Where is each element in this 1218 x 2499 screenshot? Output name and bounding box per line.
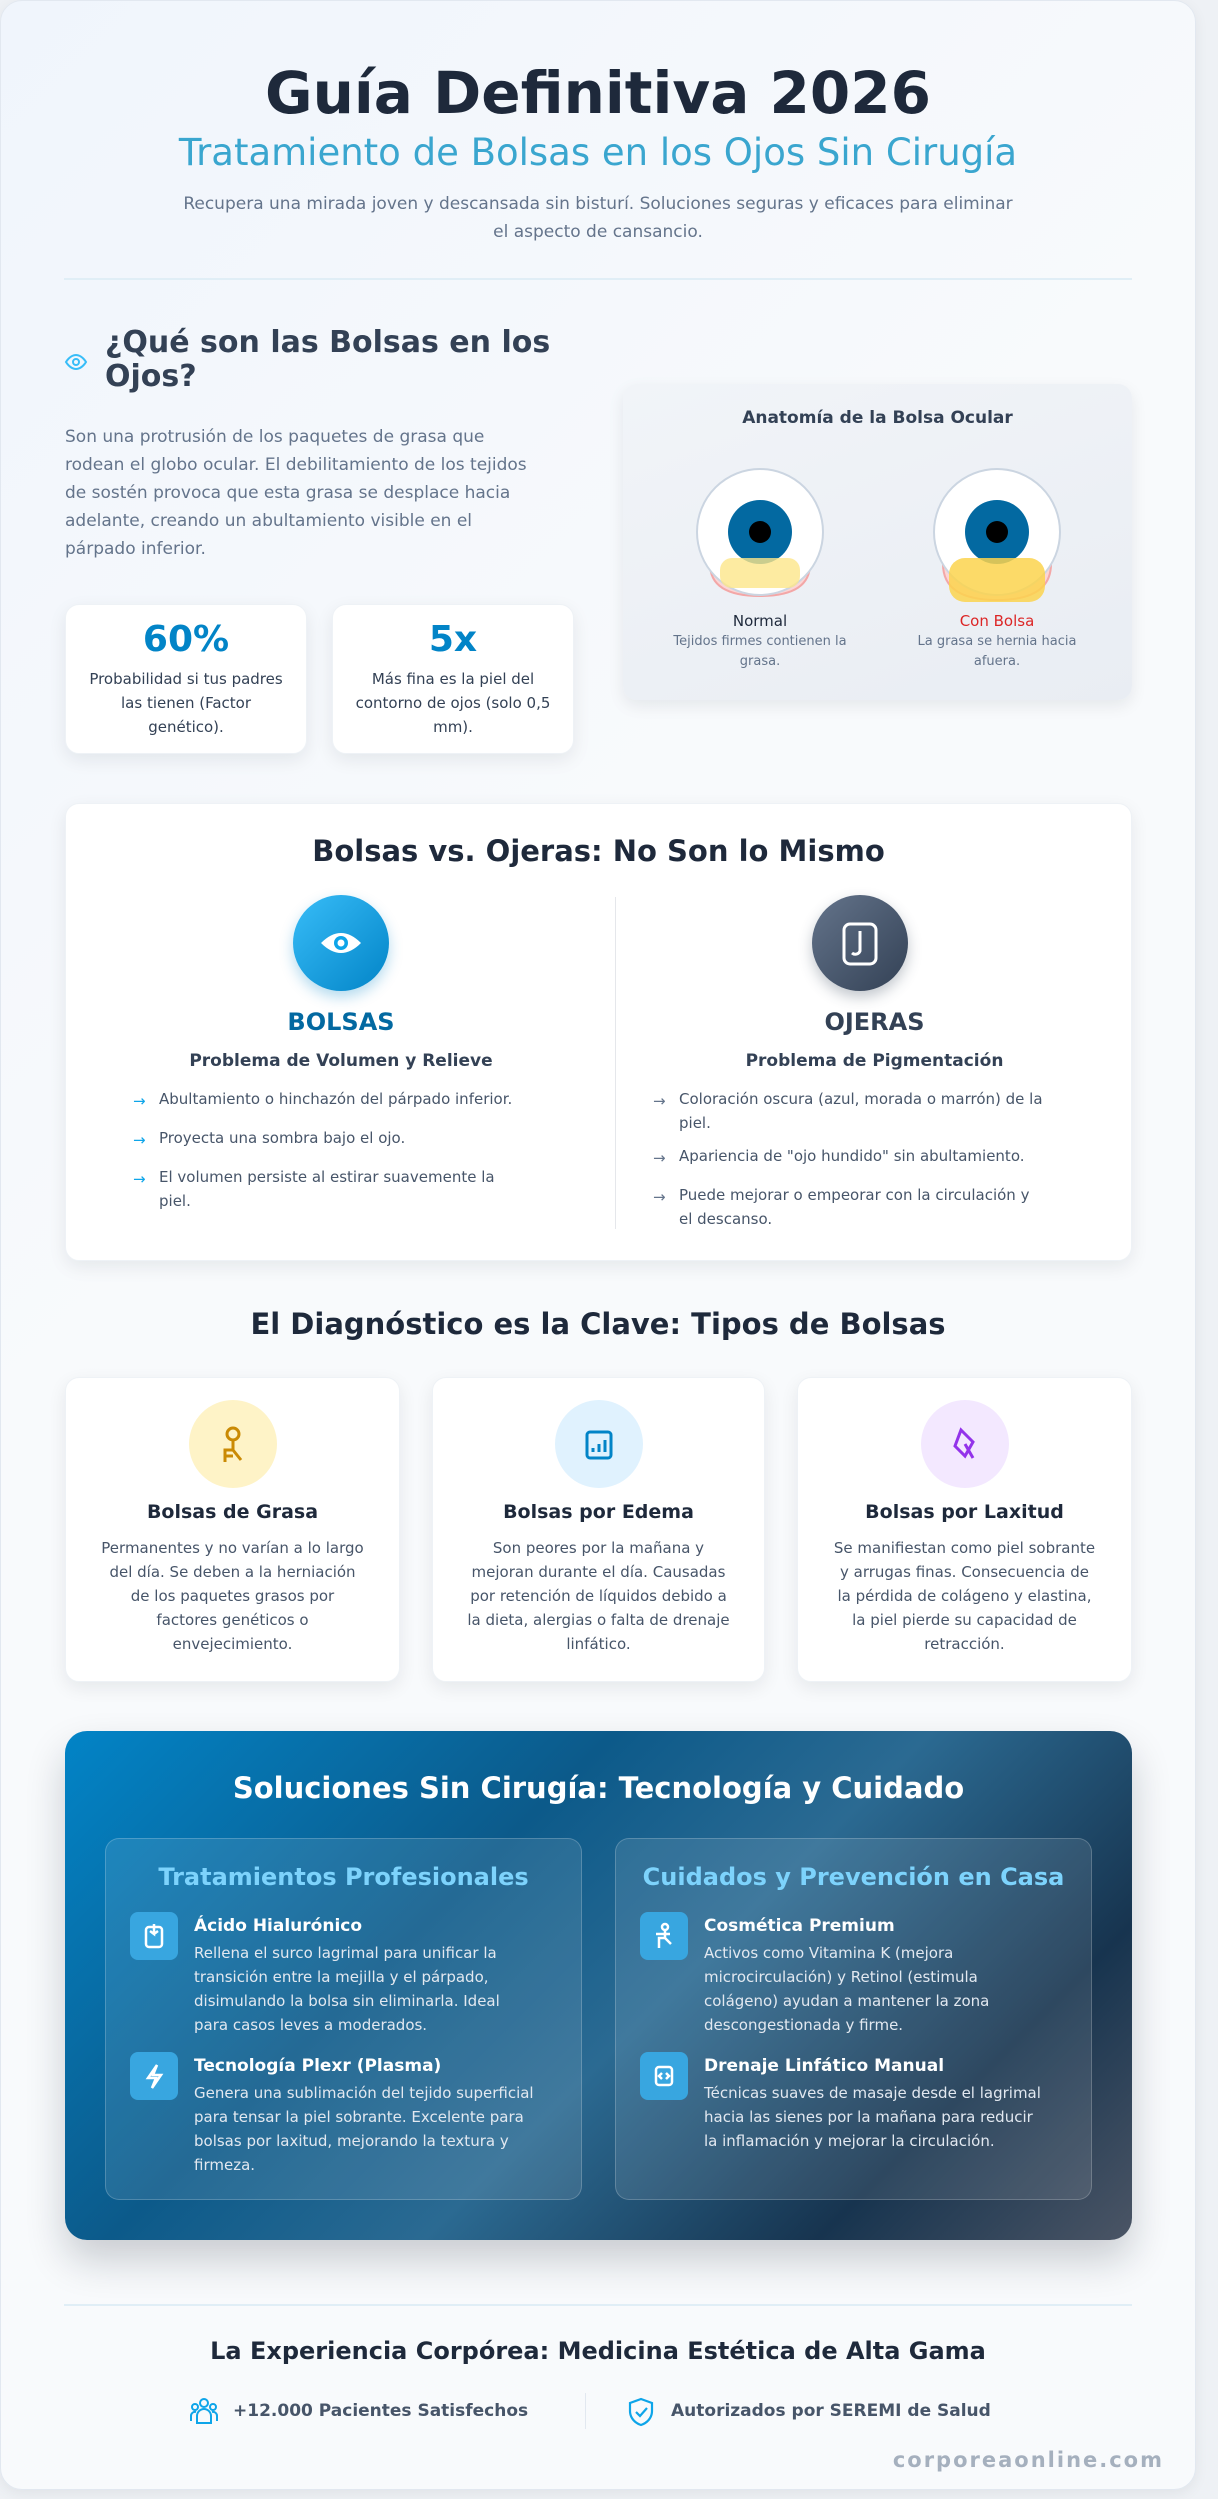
panel: bolsas vs ojeras: Problema de Pigmentación bbox=[746, 1051, 1003, 1071]
item: plexr: Genera una sublimación del tejido superficial bbox=[194, 2084, 534, 2102]
badge: seremi bbox=[628, 2398, 991, 2426]
paragraph bbox=[65, 427, 527, 559]
type card: edema: mejoran durante el día. Causadas bbox=[472, 1563, 725, 1581]
type card: grasa: de los paquetes grasos por bbox=[131, 1587, 334, 1605]
item: cosmetica bbox=[704, 1916, 989, 2034]
panel: bolsas vs ojeras: Proyecta una sombra bajo el ojo. bbox=[159, 1129, 405, 1147]
panel: bolsas vs ojeras: → bbox=[133, 1170, 146, 1188]
type card: edema: linfático. bbox=[566, 1635, 631, 1653]
badge: pacientes: +12.000 Pacientes Satisfechos bbox=[233, 2401, 528, 2421]
panel: bolsas vs ojeras: El volumen persiste al estirar suavemente la bbox=[159, 1168, 495, 1186]
type card: edema: Bolsas por Edema bbox=[503, 1501, 694, 1523]
stat card 5x: 5x bbox=[429, 619, 477, 660]
stat card 5x: Más fina es la piel del contorno de ojos (solo 0,5 mm). bbox=[356, 670, 550, 736]
type card: laxitud: y arrugas finas. Consecuencia de bbox=[840, 1563, 1089, 1581]
item: plexr: para tensar la piel sobrante. Excelente para bbox=[194, 2108, 524, 2126]
panel: bolsas vs ojeras: Bolsas vs. Ojeras: No Son lo Mismo bbox=[312, 834, 885, 868]
panel: bolsas vs ojeras: Puede mejorar o empeorar con la circulación y bbox=[679, 1186, 1029, 1204]
icon: ojeras bbox=[812, 895, 908, 991]
panel: bolsas vs ojeras: → bbox=[133, 1092, 146, 1110]
item: drenaje: la inflamación y mejorar la circulación. bbox=[704, 2132, 995, 2150]
paragraph: rodean el globo ocular. El debilitamiento de los tejidos bbox=[65, 455, 527, 475]
item: acido hialuronico: disimulando la bolsa sin eliminarla. Ideal bbox=[194, 1992, 500, 2010]
label con bolsa: Con Bolsa bbox=[960, 612, 1034, 630]
panel: bolsas vs ojeras: piel. bbox=[679, 1114, 711, 1132]
type card: edema: por retención de líquidos debido a bbox=[470, 1587, 727, 1605]
watermark: corporeaonline.com bbox=[893, 2448, 1164, 2472]
panel: bolsas vs ojeras: Apariencia de "ojo hundido" sin abultamiento. bbox=[679, 1147, 1024, 1165]
intro text bbox=[183, 194, 1013, 242]
stat card 60%: genético). bbox=[148, 718, 224, 736]
icon: syringe bbox=[130, 1912, 178, 1960]
panel: bolsas vs ojeras: → bbox=[653, 1092, 666, 1110]
type card: laxitud: Se manifiestan como piel sobrante bbox=[834, 1539, 1095, 1557]
subtitle: Tratamiento de Bolsas en los Ojos Sin Cirugía bbox=[179, 131, 1017, 174]
icon: eye bbox=[64, 354, 88, 370]
item: acido hialuronico: para casos leves a moderados. bbox=[194, 2016, 427, 2034]
sub-panel: casa: Cuidados y Prevención en Casa bbox=[643, 1863, 1064, 1891]
solutions title: Soluciones Sin Cirugía: Tecnología y Cuidado bbox=[233, 1771, 964, 1805]
icon: chart bbox=[555, 1400, 643, 1488]
panel: bolsas vs ojeras: el descanso. bbox=[679, 1210, 772, 1228]
item: acido hialuronico: transición entre la mejilla y el párpado, bbox=[194, 1968, 489, 1986]
panel: bolsas vs ojeras: Problema de Volumen y Relieve bbox=[189, 1051, 493, 1071]
panel: bolsas vs ojeras bbox=[65, 803, 1132, 1261]
type card: edema: la dieta, alergias o falta de drenaje bbox=[467, 1611, 730, 1629]
title: Guía Definitiva 2026 bbox=[265, 59, 931, 127]
item: drenaje: Técnicas suaves de masaje desde el lagrimal bbox=[704, 2084, 1041, 2102]
eye diagram: normal bbox=[696, 468, 824, 597]
type card: laxitud: Bolsas por Laxitud bbox=[865, 1501, 1064, 1523]
panel: bolsas vs ojeras: piel. bbox=[159, 1192, 191, 1210]
item: plexr bbox=[194, 2056, 534, 2174]
type card: edema bbox=[432, 1377, 765, 1682]
paragraph: de sostén provoca que esta grasa se desplace hacia bbox=[65, 483, 510, 503]
sub-panel: casa bbox=[615, 1838, 1092, 2200]
heading: diagnóstico: El Diagnóstico es la Clave: Tipos de Bolsas bbox=[250, 1307, 946, 1341]
intro text: Recupera una mirada joven y descansada sin bisturí. Soluciones seguras y eficaces para eliminar bbox=[183, 194, 1013, 214]
sub-panel: profesionales bbox=[105, 1838, 582, 2200]
item: cosmetica: Activos como Vitamina K (mejora bbox=[704, 1944, 953, 1962]
stat card 60%: 60% bbox=[143, 619, 229, 660]
icon: bolt bbox=[130, 2052, 178, 2100]
type card: grasa: envejecimiento. bbox=[173, 1635, 292, 1653]
icon: massage bbox=[640, 2052, 688, 2100]
badge: pacientes bbox=[190, 2398, 528, 2424]
type card: grasa: Permanentes y no varían a lo largo bbox=[101, 1539, 364, 1557]
stat card 60%: las tienen (Factor bbox=[121, 694, 251, 712]
item: acido hialuronico bbox=[194, 1915, 500, 2034]
icon: person bbox=[189, 1400, 277, 1488]
item: drenaje bbox=[704, 2056, 1041, 2150]
item: cosmetica: microcirculación) y Retinol (estimula bbox=[704, 1968, 978, 1986]
panel: bolsas vs ojeras: → bbox=[133, 1131, 146, 1149]
sub-panel: profesionales: Tratamientos Profesionales bbox=[158, 1863, 529, 1891]
icon: bolsas eye bbox=[293, 895, 389, 991]
type card: laxitud: la pérdida de colágeno y elastina, bbox=[837, 1587, 1092, 1605]
type card: grasa bbox=[65, 1377, 400, 1682]
item: cosmetica: colágeno) ayudan a mantener la zona bbox=[704, 1992, 989, 2010]
item: plexr: Tecnología Plexr (Plasma) bbox=[194, 2056, 441, 2076]
item: drenaje: hacia las sienes por la mañana para reducir bbox=[704, 2108, 1033, 2126]
item: cosmetica: descongestionada y firme. bbox=[704, 2016, 903, 2034]
type card: laxitud bbox=[797, 1377, 1132, 1682]
item: acido hialuronico: Rellena el surco lagrimal para unificar la bbox=[194, 1944, 497, 1962]
item: acido hialuronico: Ácido Hialurónico bbox=[194, 1916, 362, 1936]
eye diagram: con bolsa bbox=[933, 468, 1061, 602]
label con bolsa bbox=[918, 612, 1076, 669]
section heading: what are bags: Ojos? bbox=[105, 359, 197, 394]
label con bolsa: La grasa se hernia hacia afuera. bbox=[918, 634, 1076, 669]
paragraph: adelante, creando un abultamiento visible en el bbox=[65, 511, 472, 531]
stat card 5x bbox=[332, 604, 574, 754]
type card: laxitud: la piel pierde su capacidad de bbox=[852, 1611, 1077, 1629]
panel: bolsas vs ojeras: → bbox=[653, 1149, 666, 1167]
stat card 60% bbox=[65, 604, 307, 754]
item: cosmetica: Cosmética Premium bbox=[704, 1916, 895, 1936]
column: bolsas: BOLSAS bbox=[287, 1008, 395, 1036]
section heading: what are bags: ¿Qué son las Bolsas en los bbox=[105, 325, 550, 360]
intro text: el aspecto de cansancio. bbox=[493, 222, 703, 242]
anatomy panel: Anatomía de la Bolsa Ocular bbox=[742, 408, 1013, 428]
type card: laxitud: retracción. bbox=[924, 1635, 1005, 1653]
type card: grasa: del día. Se deben a la herniación bbox=[109, 1563, 356, 1581]
panel: soluciones bbox=[65, 1731, 1132, 2240]
paragraph: Son una protrusión de los paquetes de grasa que bbox=[65, 427, 484, 447]
column: ojeras: OJERAS bbox=[824, 1008, 925, 1036]
icon: cosmetics bbox=[640, 1912, 688, 1960]
stat card 60%: Probabilidad si tus padres bbox=[89, 670, 283, 688]
panel: bolsas vs ojeras: → bbox=[653, 1188, 666, 1206]
type card: grasa: factores genéticos o bbox=[156, 1611, 309, 1629]
icon: drop bbox=[921, 1400, 1009, 1488]
footer title: La Experiencia Corpórea: Medicina Estética de Alta Gama bbox=[210, 2337, 986, 2365]
item: plexr: bolsas por laxitud, mejorando la textura y bbox=[194, 2132, 509, 2150]
section heading: what are bags bbox=[64, 325, 550, 394]
panel: bolsas vs ojeras: Coloración oscura (azul, morada o marrón) de la bbox=[679, 1090, 1043, 1108]
anatomy panel bbox=[623, 384, 1132, 700]
badge: seremi: Autorizados por SEREMI de Salud bbox=[671, 2401, 991, 2421]
type card: grasa: Bolsas de Grasa bbox=[147, 1501, 318, 1523]
label normal: Normal bbox=[733, 612, 787, 630]
label normal: Tejidos firmes contienen la grasa. bbox=[673, 634, 847, 669]
label normal bbox=[673, 612, 847, 669]
item: plexr: firmeza. bbox=[194, 2156, 255, 2174]
item: drenaje: Drenaje Linfático Manual bbox=[704, 2056, 944, 2076]
type card: edema: Son peores por la mañana y bbox=[493, 1539, 704, 1557]
panel: bolsas vs ojeras: Abultamiento o hinchazón del párpado inferior. bbox=[159, 1090, 512, 1108]
paragraph: párpado inferior. bbox=[65, 539, 206, 559]
